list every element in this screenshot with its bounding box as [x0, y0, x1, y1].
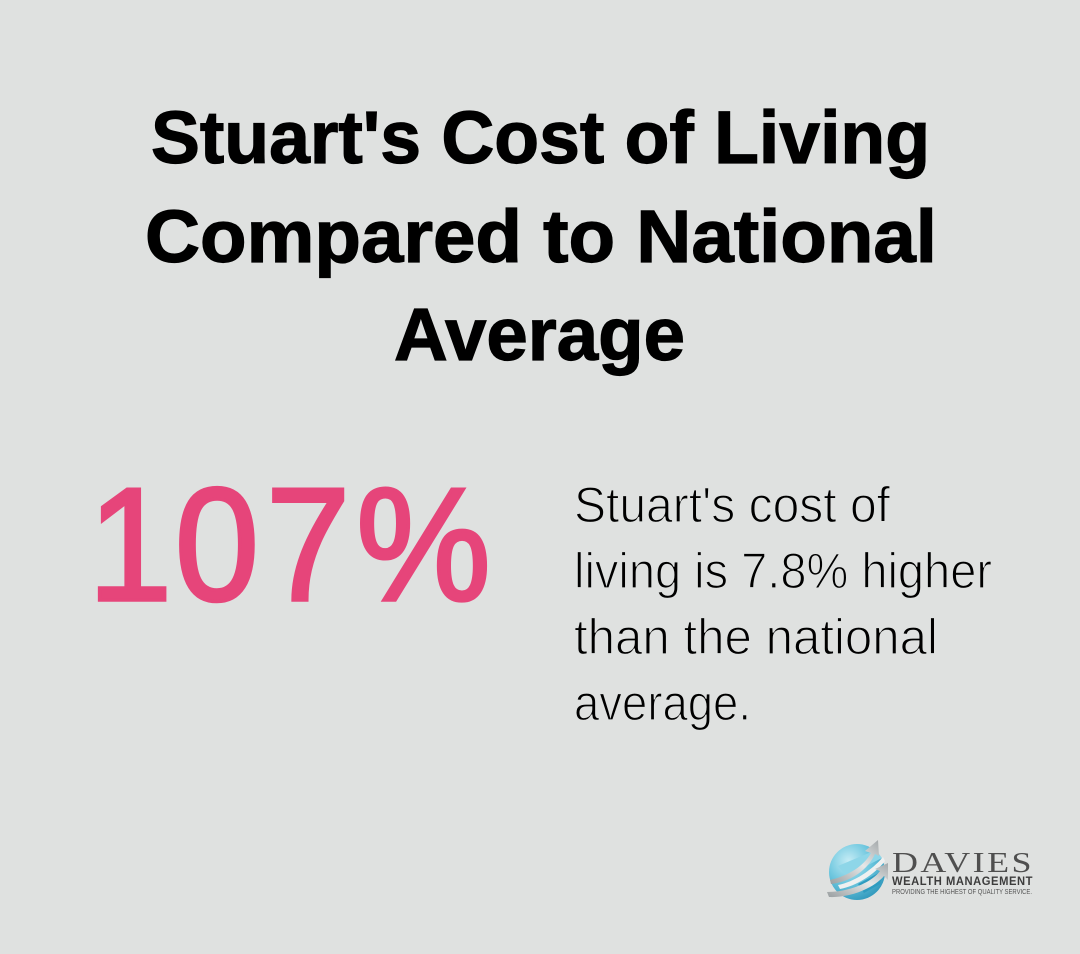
title: Stuart's Cost of Living — [151, 96, 930, 179]
description text: than the national — [574, 609, 938, 665]
logo: Davies Wealth Management — [827, 840, 1034, 900]
description text: living is 7.8% higher — [574, 543, 992, 599]
icon: globe with arrows — [827, 840, 888, 900]
logo wordmark: DAVIES — [892, 847, 1034, 879]
title — [145, 96, 937, 376]
title: Compared to National — [145, 195, 937, 278]
title: Average — [394, 293, 685, 376]
description text: average. — [574, 675, 751, 731]
logo subtitle: WEALTH MANAGEMENT — [892, 874, 1033, 888]
logo tagline: PROVIDING THE HIGHEST OF QUALITY SERVICE. — [892, 887, 1032, 896]
big statistic: 107%: 107% — [88, 456, 491, 635]
description text — [574, 477, 992, 731]
description text: Stuart's cost of — [574, 477, 890, 533]
